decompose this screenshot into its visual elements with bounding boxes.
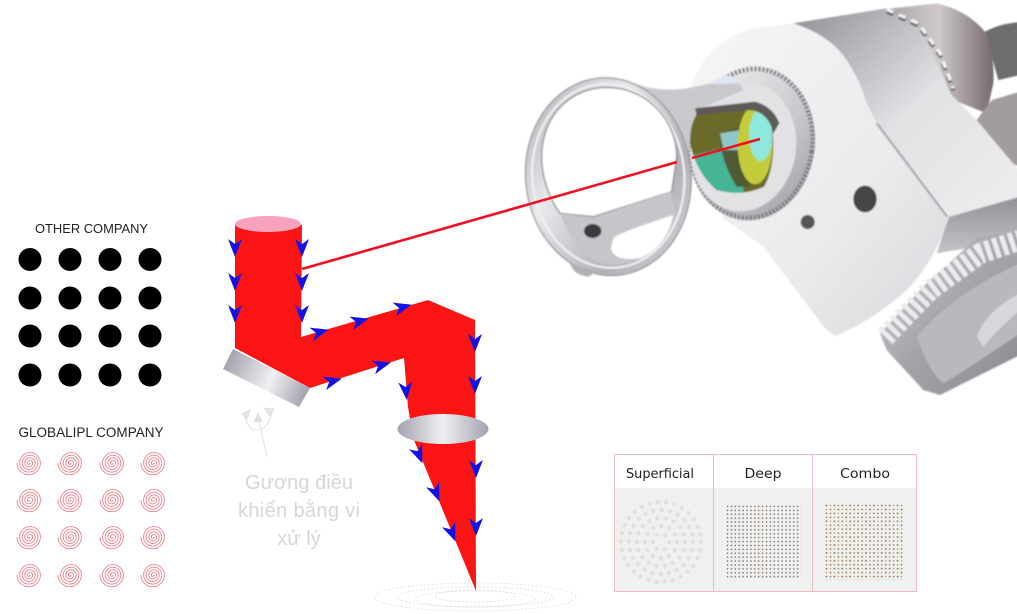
body underside	[937, 193, 1017, 253]
label: other company: OTHER COMPANY	[35, 221, 148, 236]
superficial dot pattern	[621, 502, 701, 582]
caption: micro-controlled mirror: khiển bằng vi	[238, 499, 360, 522]
mirror	[223, 349, 310, 407]
lens housing	[688, 66, 816, 222]
label: global ipl company: GLOBALIPL COMPANY	[18, 425, 164, 440]
deep dot pattern	[726, 505, 801, 579]
lens window	[689, 109, 774, 194]
panel: treatment patterns	[614, 454, 917, 592]
focusing lens	[398, 414, 488, 444]
knurled dial edge	[887, 9, 953, 90]
target skin rings	[374, 583, 576, 611]
bottom knurled knob	[880, 230, 1017, 395]
back cylinder	[883, 3, 994, 113]
panel outline and dividers	[614, 454, 916, 592]
red laser beam path	[235, 225, 476, 591]
caption: micro-controlled mirror: xử lý	[277, 528, 321, 550]
retaining ring and arm	[516, 70, 779, 284]
red laser line	[302, 139, 760, 269]
combo dot pattern	[825, 504, 904, 580]
heading: superficial: Superficial	[626, 467, 694, 482]
screw holes	[853, 186, 877, 212]
caption: micro-controlled mirror: Gương điều	[245, 472, 353, 494]
black dot grid	[18, 248, 162, 386]
beam entry ellipse	[235, 216, 301, 232]
white body face	[692, 23, 949, 336]
blue direction arrows	[228, 239, 483, 544]
braided cable	[985, 22, 1017, 80]
icon: mirror tilt arrows	[242, 408, 274, 457]
heading: deep: Deep	[744, 467, 782, 482]
heading: combo: Combo	[840, 467, 890, 482]
spiral dot grid	[17, 453, 164, 587]
caption: micro-controlled mirror	[238, 472, 360, 550]
product photo: laser handpiece	[516, 3, 1017, 395]
rear lower housing	[972, 92, 1017, 167]
body side	[793, 8, 1017, 217]
